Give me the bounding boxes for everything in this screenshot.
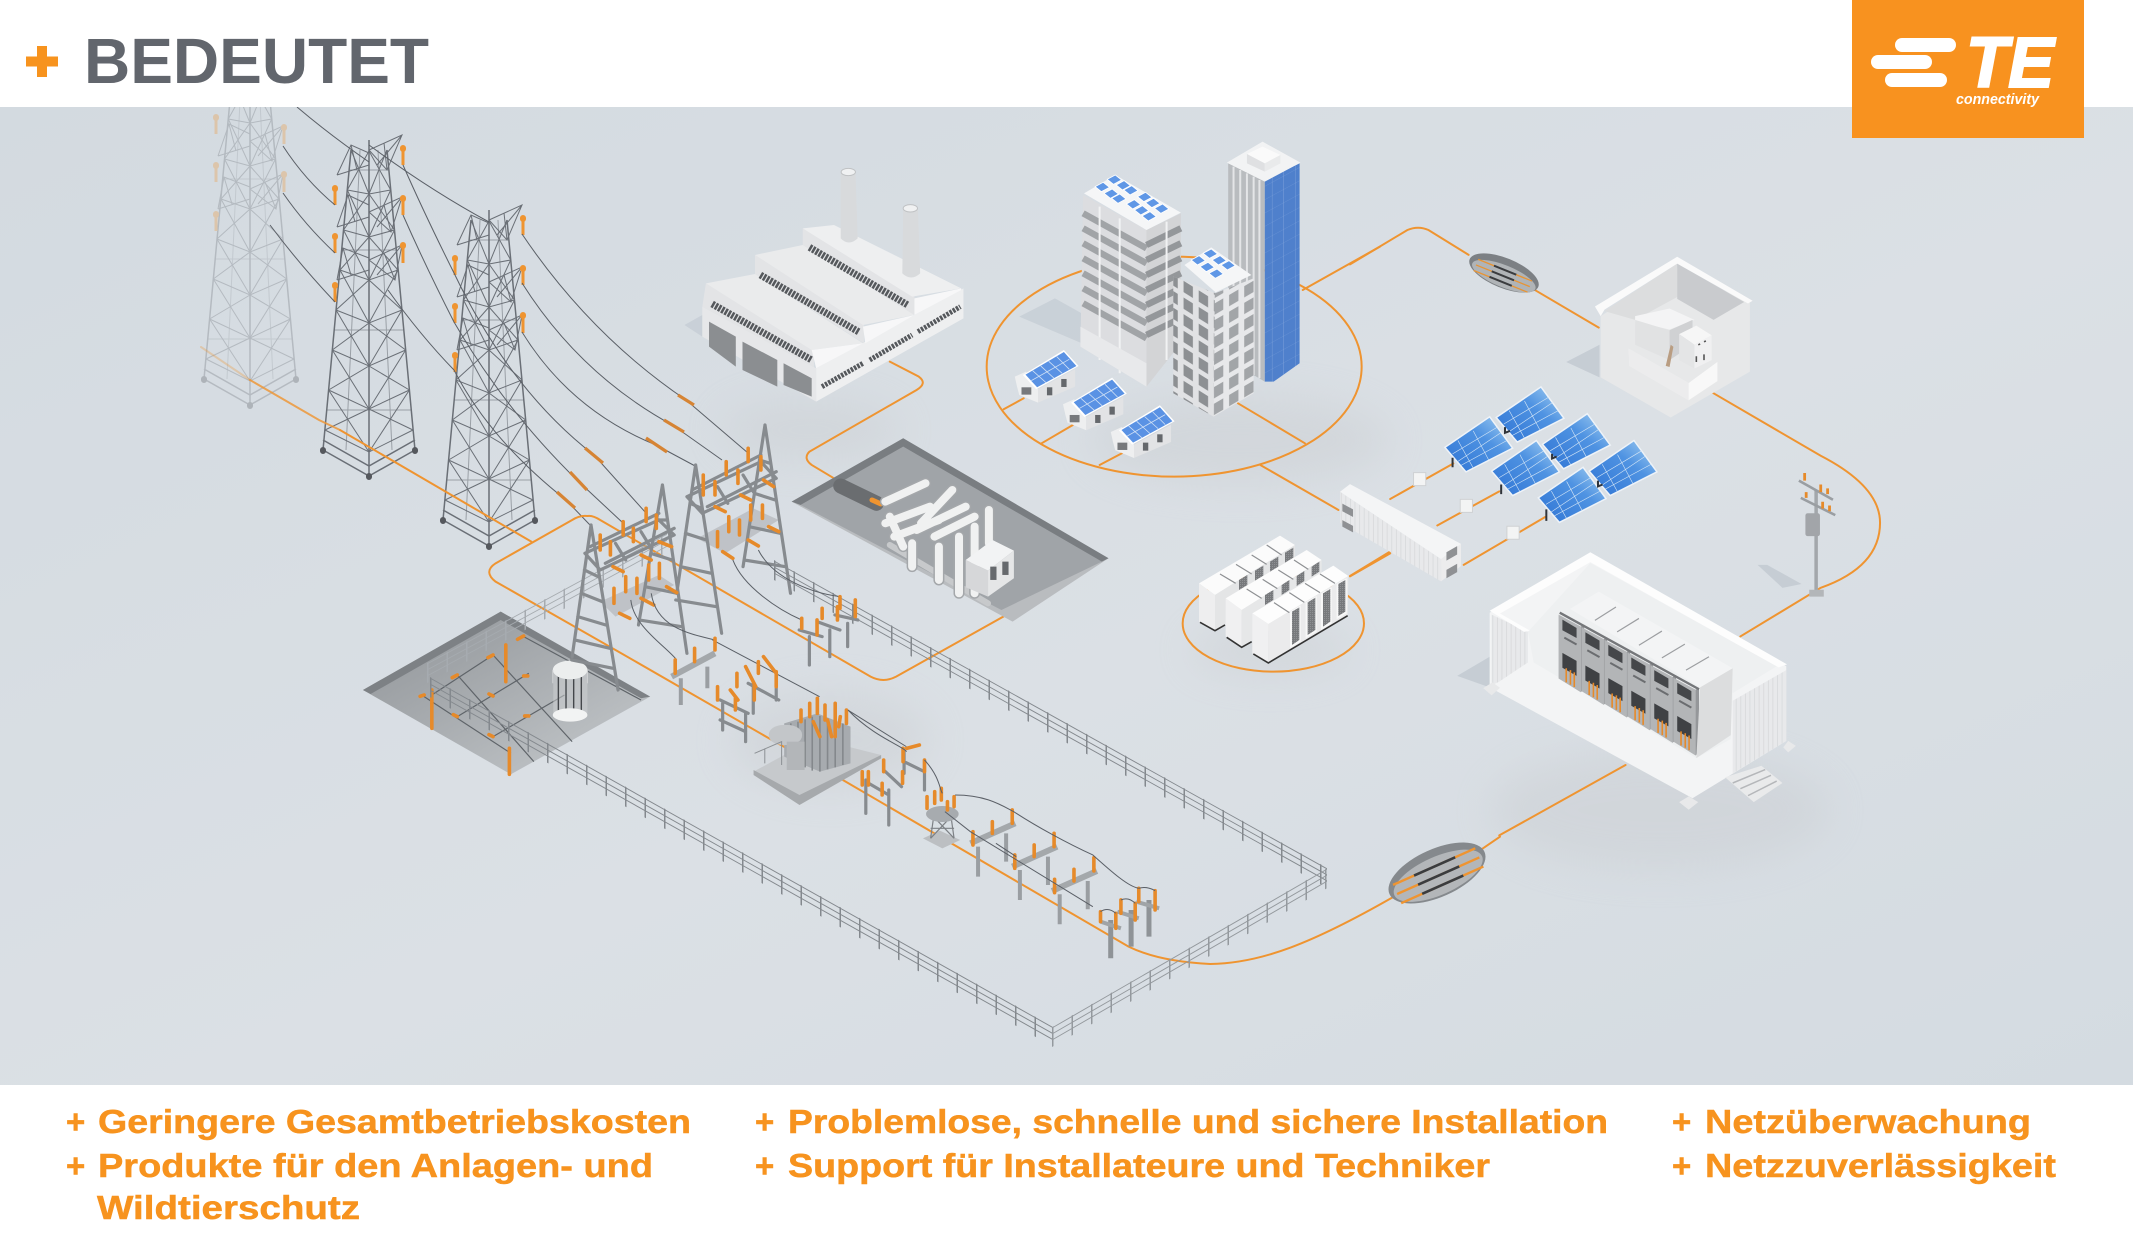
junction boxes xyxy=(1414,473,1519,539)
switch frames xyxy=(862,745,924,825)
benefit column three xyxy=(1672,1103,2056,1184)
switchgear cabinets xyxy=(1559,592,1733,758)
city buildings xyxy=(1015,142,1300,458)
gantries xyxy=(572,425,906,747)
logo letters: TE xyxy=(1966,24,2057,103)
kiosk substation xyxy=(1595,257,1753,418)
cable: rack circle xyxy=(1183,552,1390,672)
line insulators xyxy=(557,395,694,508)
roof panels wide xyxy=(1095,175,1169,221)
kiosk equipment xyxy=(1635,308,1712,369)
end columns xyxy=(1101,888,1159,958)
back row xyxy=(1199,536,1295,631)
house two xyxy=(1063,378,1127,430)
container xyxy=(1340,484,1461,581)
joint two xyxy=(1380,830,1494,916)
benefit column two: + xyxy=(755,1103,774,1140)
benefit column one: + xyxy=(66,1147,85,1184)
benefit column two: Problemlose, schnelle und sichere Installation xyxy=(788,1103,1608,1140)
benefit column one: Geringere Gesamtbetriebskosten xyxy=(98,1103,691,1140)
title text: BEDEUTET xyxy=(84,25,429,97)
fence south west xyxy=(430,678,1052,1039)
benefit column two xyxy=(755,1103,1608,1184)
cable: east loop xyxy=(1350,228,1880,835)
benefit column three: + xyxy=(1672,1147,1691,1184)
bus wires xyxy=(848,710,1139,907)
H frame two xyxy=(1012,833,1057,900)
cable: factory and city xyxy=(807,247,1380,510)
front row xyxy=(1252,566,1348,663)
solar field and battery container xyxy=(1340,387,1657,581)
logo xyxy=(1852,0,2084,138)
H frame three xyxy=(1052,858,1097,924)
GIS cabinet xyxy=(966,540,1014,597)
right pit xyxy=(792,438,1109,622)
tunnel tube xyxy=(841,486,881,504)
building small xyxy=(1173,247,1254,417)
fence south east xyxy=(1052,869,1327,1040)
left pit xyxy=(363,612,650,774)
voltage transformer xyxy=(923,788,960,848)
benefit column two: Support für Installateure und Techniker xyxy=(788,1147,1490,1184)
fence north east xyxy=(774,561,1327,881)
house one xyxy=(1015,350,1079,403)
switchgear near pit xyxy=(672,597,858,742)
benefit column three: Netzüberwachung xyxy=(1705,1103,2031,1140)
middle row xyxy=(1226,550,1322,647)
top header band xyxy=(0,0,2133,107)
building tall blue xyxy=(1227,142,1300,382)
benefit column three: + xyxy=(1672,1103,1691,1140)
GIS machine xyxy=(885,483,989,603)
H frames xyxy=(970,810,1015,877)
chimneys xyxy=(841,168,920,277)
floor shadows xyxy=(684,298,1830,870)
benefit column one: Wildtierschutz xyxy=(97,1189,360,1226)
switch frames xyxy=(718,657,779,742)
tower three xyxy=(443,205,535,547)
faded tower xyxy=(204,64,296,406)
logo tagline: connectivity xyxy=(1956,91,2040,108)
bottom band xyxy=(0,1085,2133,1250)
benefit column one: + xyxy=(66,1103,85,1140)
solar array xyxy=(1445,387,1657,522)
fences xyxy=(427,534,1327,1040)
feet and stairs xyxy=(1483,682,1796,810)
kiosk plinth xyxy=(1629,349,1717,400)
benefit column two: + xyxy=(755,1147,774,1184)
title xyxy=(26,25,429,97)
transformer xyxy=(754,698,881,805)
cylinder cage xyxy=(553,661,587,722)
switchgear container xyxy=(1483,552,1796,810)
utility pole xyxy=(1799,473,1835,597)
power lines xyxy=(270,107,748,525)
cable: substation main xyxy=(201,347,1500,964)
benefit column one xyxy=(66,1103,691,1226)
factory xyxy=(702,168,963,402)
tower two xyxy=(323,135,415,477)
background xyxy=(0,107,2133,1085)
server racks xyxy=(1199,536,1348,663)
house three xyxy=(1111,405,1175,458)
title plus xyxy=(26,46,58,77)
fence north west xyxy=(427,534,667,676)
east switchgear xyxy=(848,710,1159,958)
building wide xyxy=(1080,175,1181,387)
benefit column three: Netzzuverlässigkeit xyxy=(1705,1147,2056,1184)
H frame xyxy=(672,638,715,705)
logo bars xyxy=(1871,38,1956,87)
joint one xyxy=(1464,245,1544,301)
benefit column one: Produkte für den Anlagen- und xyxy=(98,1147,653,1184)
